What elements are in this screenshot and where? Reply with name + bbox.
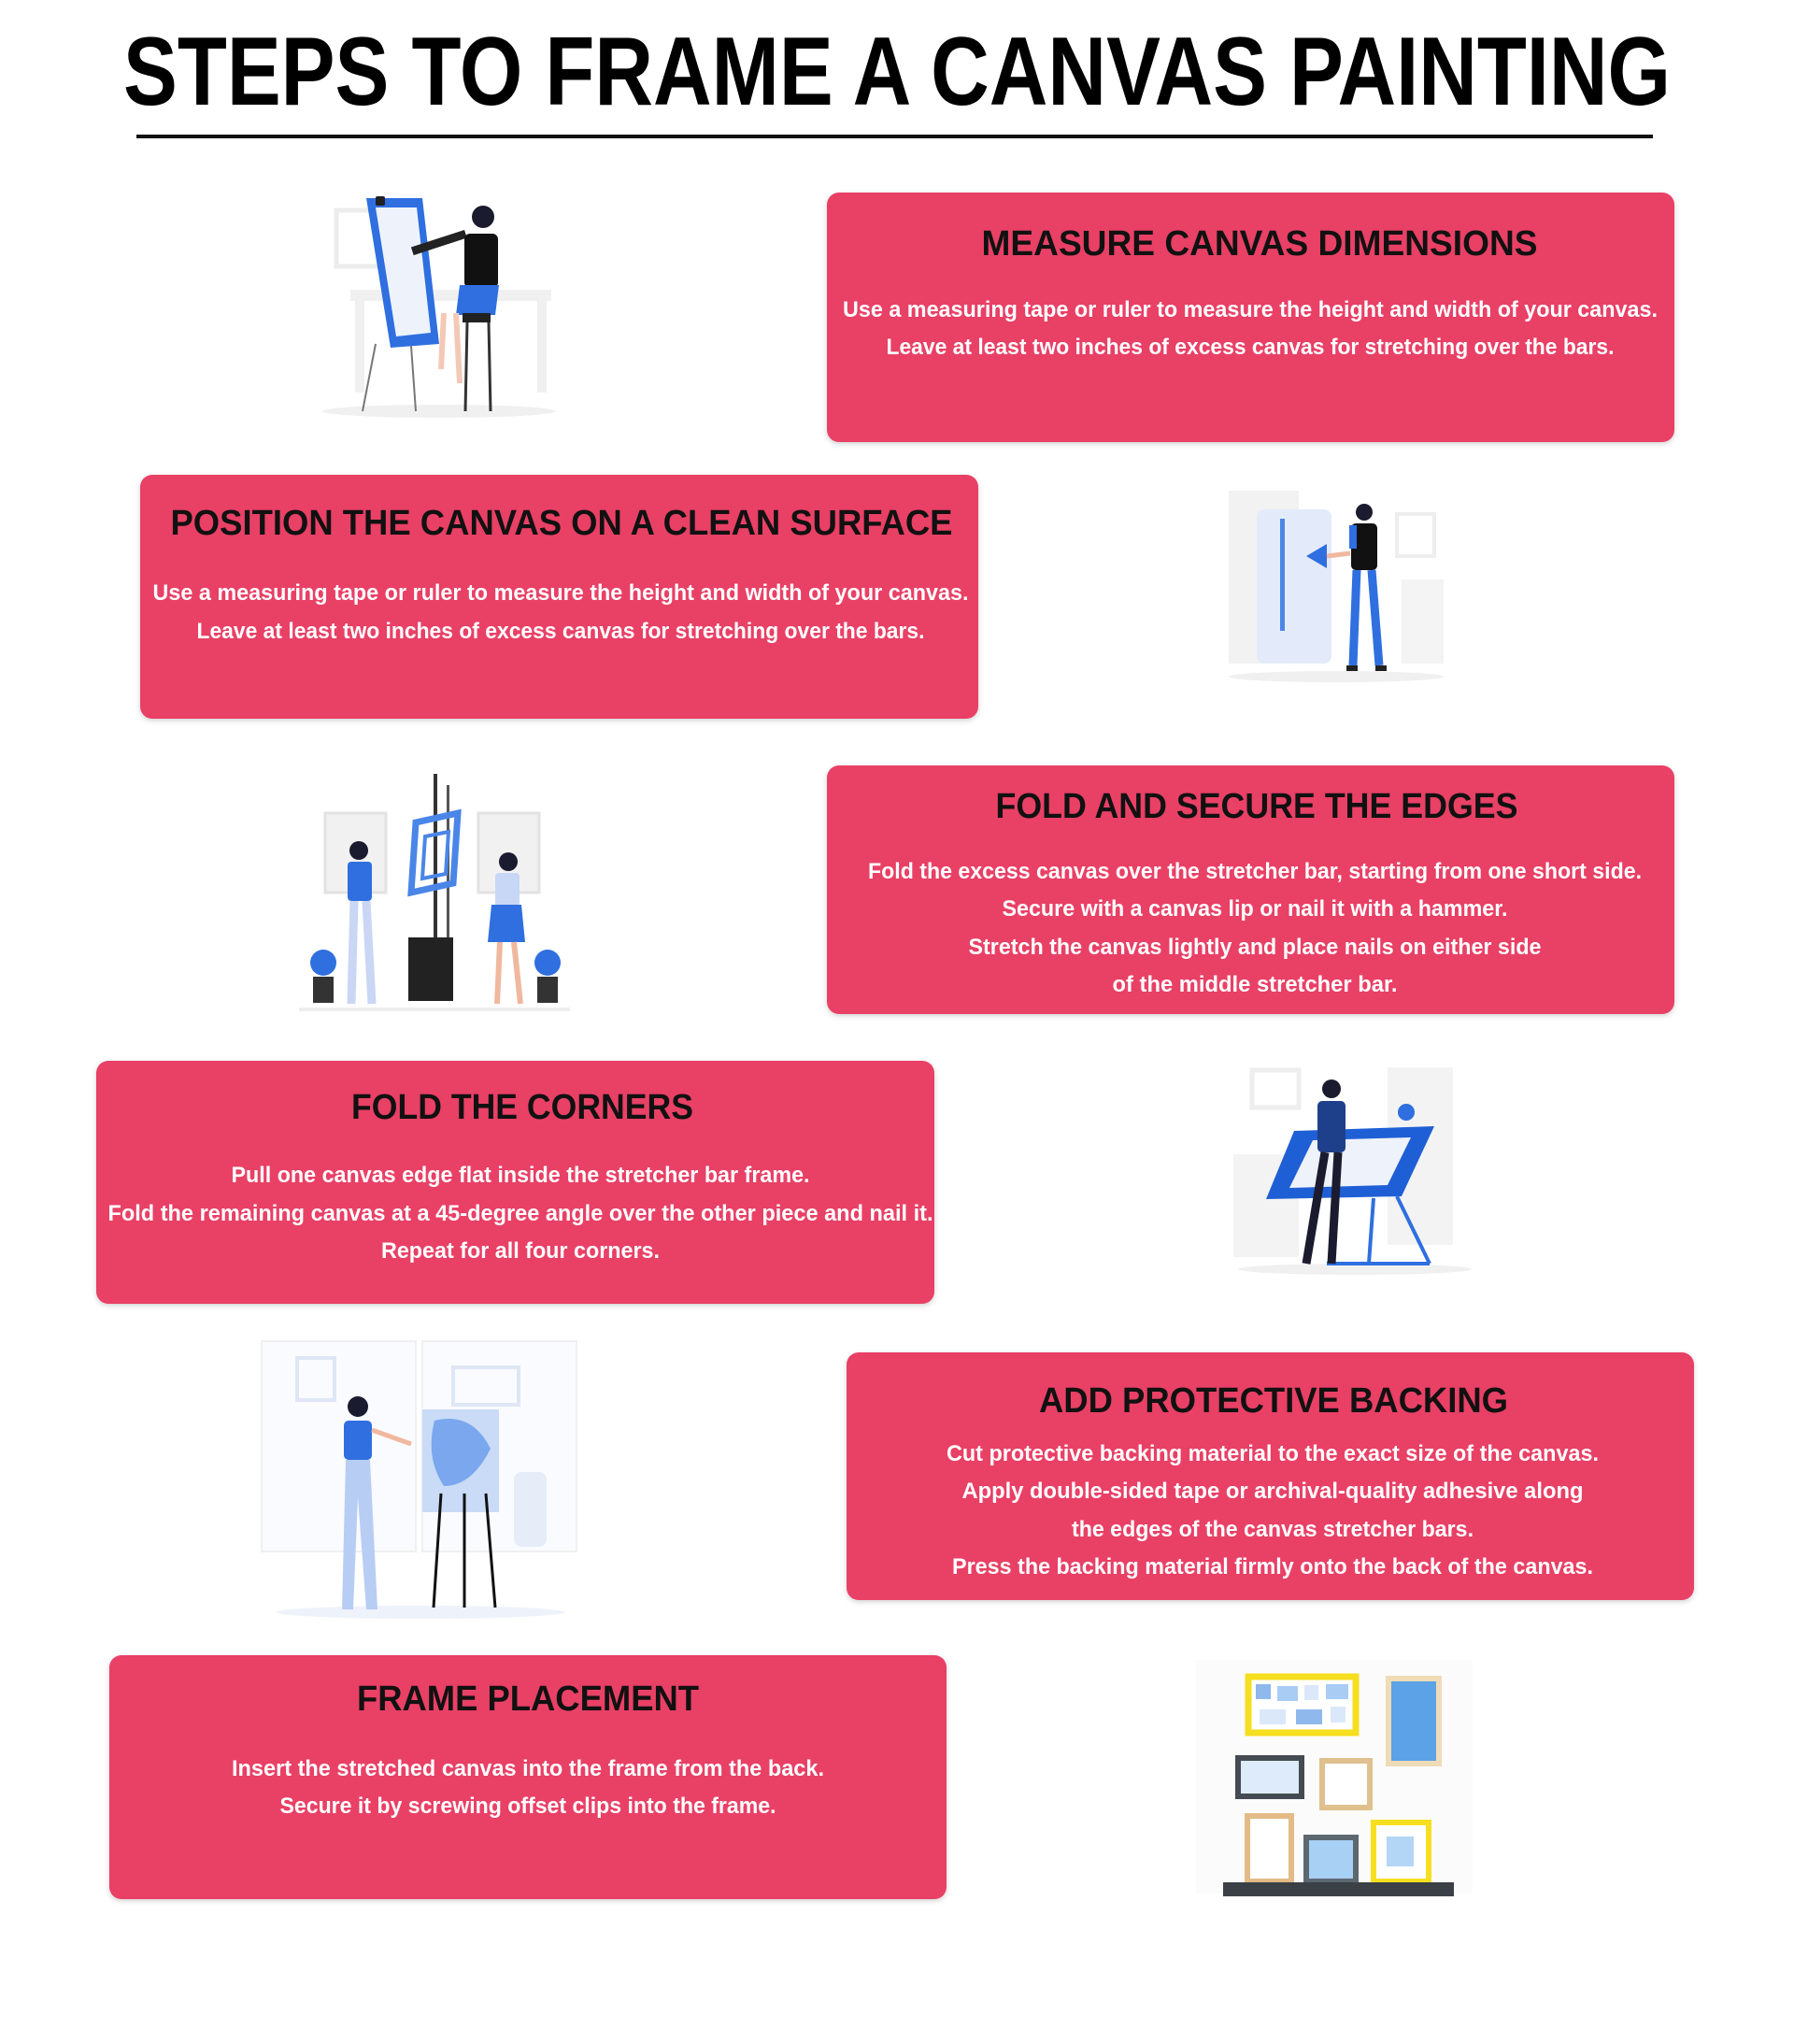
text block: corners — [108, 1163, 933, 1264]
icon: man at drafting table — [1233, 1067, 1472, 1275]
panel: fold and secure edges — [827, 765, 1674, 1014]
heading: corners: FOLD THE CORNERS — [351, 1088, 693, 1127]
icon: gallery wall of frames — [1196, 1660, 1473, 1896]
panel: fold the corners — [96, 1061, 934, 1304]
text block: corners: Repeat for all four corners. — [381, 1238, 660, 1264]
text block: position: Leave at least two inches of excess canvas for stretching over the bars. — [196, 619, 925, 644]
text block: fold edges: Stretch the canvas lightly and place nails on either side — [968, 935, 1542, 960]
heading: backing: ADD PROTECTIVE BACKING — [1039, 1381, 1508, 1421]
text block: corners: Pull one canvas edge flat inside the stretcher bar frame. — [232, 1163, 809, 1188]
text block: backing: Cut protective backing material to the exact size of the canvas. — [947, 1441, 1599, 1466]
text block: fold edges: of the middle stretcher bar. — [1112, 972, 1398, 997]
panel: frame placement — [109, 1655, 947, 1899]
text block: position — [153, 580, 968, 644]
text block: position: Use a measuring tape or ruler to measure the height and width of your canvas. — [153, 580, 968, 606]
heading: frame placement: FRAME PLACEMENT — [357, 1680, 699, 1719]
text block: measure: Use a measuring tape or ruler to measure the height and width of your canvas. — [843, 297, 1658, 322]
text block: measure — [843, 297, 1658, 360]
icon: woman measuring at easel — [322, 196, 556, 418]
text block: corners: Fold the remaining canvas at a 45-degree angle over the other piece and nail it. — [108, 1201, 933, 1226]
panel: position canvas — [140, 475, 978, 719]
text block: fold edges: Fold the excess canvas over the stretcher bar, starting from one short side. — [868, 859, 1642, 884]
text block: frame placement: Insert the stretched canvas into the frame from the back. — [232, 1756, 824, 1781]
icon: woman painting at easel — [262, 1341, 577, 1619]
text block: backing: Apply double-sided tape or archival-quality adhesive along — [962, 1479, 1583, 1504]
text block: measure: Leave at least two inches of excess canvas for stretching over the bars. — [886, 335, 1615, 360]
heading: measure: MEASURE CANVAS DIMENSIONS — [981, 224, 1538, 264]
text block: fold edges: Secure with a canvas lip or nail it with a hammer. — [1002, 896, 1508, 922]
icon: two people hanging frame — [299, 774, 570, 1011]
text block: frame placement — [232, 1756, 824, 1819]
text block: backing: Press the backing material firmly onto the back of the canvas. — [952, 1554, 1593, 1579]
text block: backing — [947, 1441, 1599, 1579]
icon: man with spatula — [1229, 491, 1444, 682]
text block: frame placement: Secure it by screwing offset clips into the frame. — [280, 1794, 776, 1819]
panel: add protective backing — [847, 1352, 1694, 1600]
panel: measure canvas dimensions — [827, 193, 1674, 442]
text block: fold edges — [868, 859, 1642, 997]
text block: backing: the edges of the canvas stretcher bars. — [1072, 1517, 1474, 1542]
heading: fold edges: FOLD AND SECURE THE EDGES — [996, 787, 1517, 826]
heading: position: POSITION THE CANVAS ON A CLEAN SURFACE — [170, 504, 953, 543]
